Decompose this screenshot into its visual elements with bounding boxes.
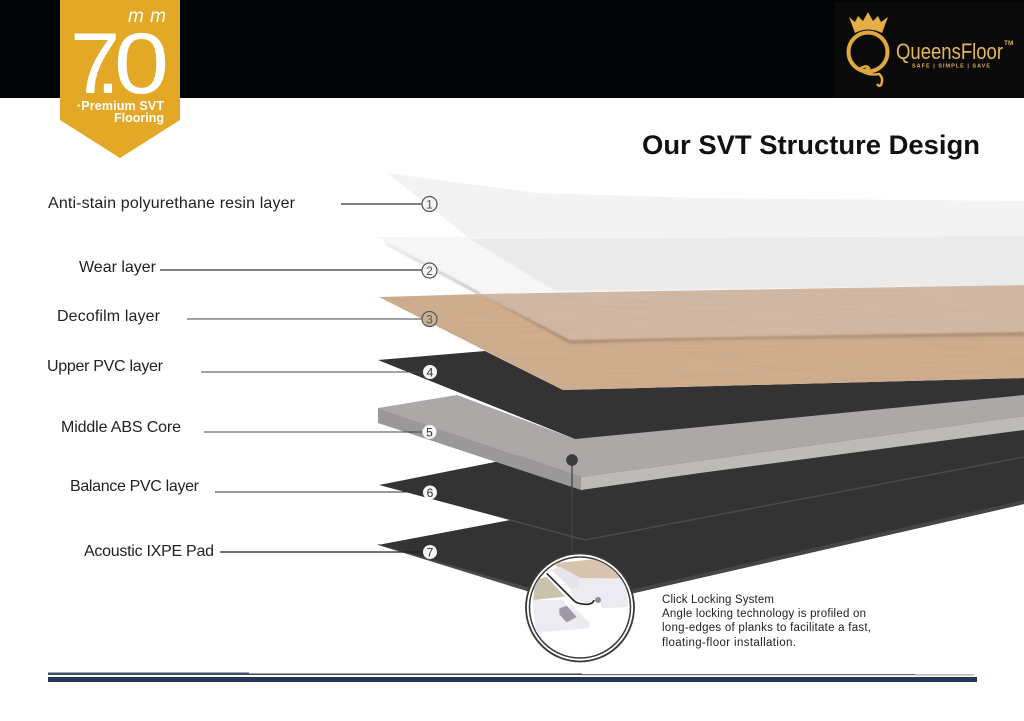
layer 7: acoustic IXPE pad [378, 457, 1024, 594]
label 3: Decofilm layer [57, 308, 161, 325]
label 5: Middle ABS Core [61, 419, 181, 436]
label 2: Wear layer [79, 259, 157, 276]
leader 4 [47, 358, 437, 380]
leader 7 [84, 543, 437, 560]
title: Our SVT Structure Design [642, 130, 980, 160]
layer 3: decofilm [379, 284, 1024, 390]
logo wordmark: QueensFloor [896, 39, 1003, 64]
front edge [581, 416, 1024, 490]
thickness number: 7 [70, 15, 120, 112]
callout: click locking text: long-edges of planks to facilitate a fast, [662, 622, 871, 634]
label 1: Anti-stain polyurethane resin layer [48, 195, 296, 212]
layer 5: middle ABS core [378, 395, 1024, 490]
icon: crown [849, 12, 888, 33]
leader 6 [70, 478, 437, 500]
leader 6: 6 [427, 486, 434, 500]
left edge [378, 408, 581, 490]
footer rule [48, 672, 977, 682]
layer 1: anti-stain resin [387, 173, 1024, 239]
label 4: Upper PVC layer [47, 358, 164, 375]
thickness number [70, 15, 169, 112]
cast shadow [480, 294, 1024, 344]
logo tagline: SAFE | SIMPLE | SAVE [912, 64, 990, 70]
label 7: Acoustic IXPE Pad [84, 543, 214, 560]
label 6: Balance PVC layer [70, 478, 200, 495]
trademark: TM [1004, 40, 1013, 47]
icon: click lock magnifier [526, 554, 634, 662]
top face [378, 395, 1024, 477]
header bar [0, 0, 1024, 98]
badge: 7.0 mm [60, 0, 180, 158]
leader 7: 7 [427, 546, 434, 560]
leader 5 [61, 419, 436, 440]
leader 3: 3 [426, 312, 433, 326]
badge caption: ·Premium SVT [77, 99, 164, 113]
unit: mm [128, 6, 166, 27]
layer 6: balance PVC [379, 395, 1024, 540]
callout: click locking text: Click Locking System [662, 594, 774, 606]
callout: click locking text: Angle locking technology is profiled on [662, 608, 866, 620]
leader 5: 5 [426, 426, 433, 440]
layer 2: wear layer [377, 236, 1024, 294]
thickness number: . [96, 16, 120, 112]
badge caption [77, 99, 164, 125]
thickness number: 0 [114, 15, 169, 112]
icon: letter Q [848, 32, 888, 86]
leader 3 [57, 308, 437, 326]
leader 1: 1 [426, 198, 433, 212]
layer 4: upper PVC [378, 351, 1024, 439]
badge caption: Flooring [114, 111, 164, 125]
callout: click locking text: floating-floor installation. [662, 637, 796, 649]
leader 2: 2 [426, 264, 433, 278]
logo: QueensFloor [835, 2, 1024, 97]
pointer to click lock [566, 454, 578, 556]
leader 4: 4 [427, 366, 434, 380]
leader 2 [79, 259, 437, 278]
leader 1 [48, 195, 437, 212]
wear layer tinted wood [480, 284, 1024, 340]
